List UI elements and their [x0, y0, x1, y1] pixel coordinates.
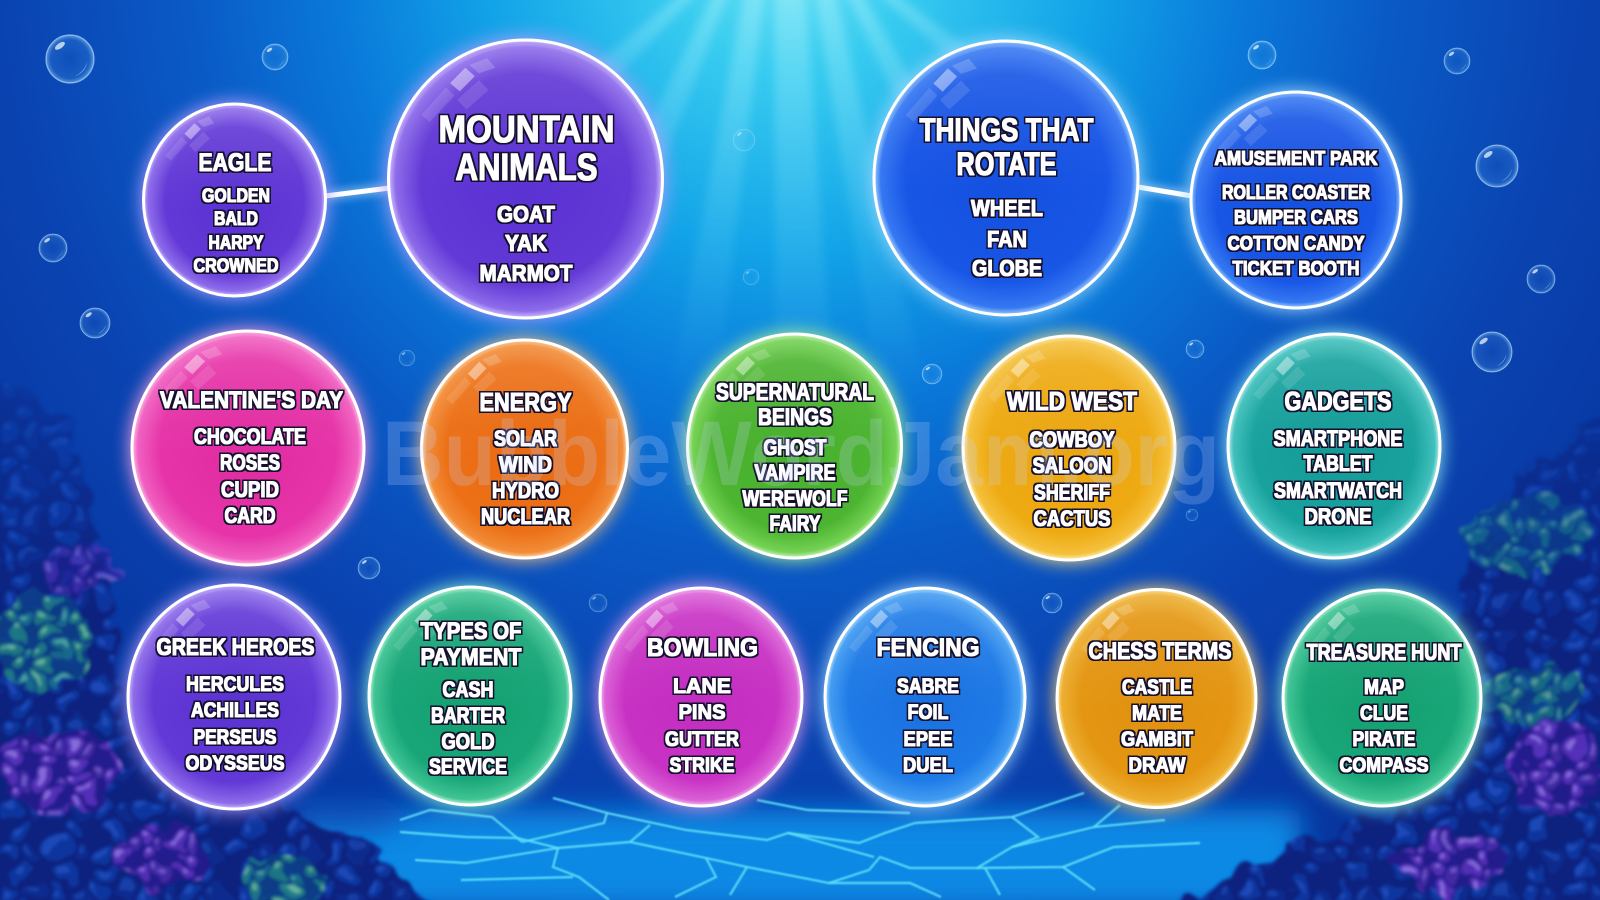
heading: gadgets: GADGETS [1284, 386, 1392, 416]
word list: supernatural beings: GHOST [764, 435, 827, 460]
word list: eagle: CROWNED [194, 256, 278, 277]
heading: things that rotate: THINGS THAT [920, 112, 1094, 148]
word list: valentine's day: ROSES [220, 450, 280, 475]
word list: mountain animals: YAK [505, 230, 547, 256]
heading: chess terms: CHESS TERMS [1088, 638, 1232, 665]
word list: gadgets: TABLET [1304, 451, 1373, 476]
word list: bowling: STRIKE [670, 754, 734, 777]
word list: chess terms: GAMBIT [1121, 728, 1193, 751]
bubble: energy [422, 340, 628, 558]
word list: fencing: EPEE [904, 728, 952, 751]
heading: types of payment [420, 618, 522, 671]
heading: valentine's day: VALENTINE'S DAY [160, 387, 343, 414]
bubble: gadgets [1228, 334, 1440, 558]
word list: supernatural beings: WEREWOLF [742, 486, 848, 511]
coral reef: left [0, 383, 450, 900]
word list: types of payment: CASH [442, 677, 494, 702]
heading: greek heroes: GREEK HEROES [156, 634, 314, 661]
word list: treasure hunt: COMPASS [1340, 754, 1428, 777]
heading: fencing: FENCING [876, 634, 980, 662]
heading: things that rotate: ROTATE [956, 146, 1056, 182]
small floating bubbles [39, 35, 1555, 613]
word list: gadgets: DRONE [1304, 504, 1372, 529]
word list: types of payment: BARTER [431, 703, 505, 728]
word list: valentine's day [194, 424, 306, 528]
word list: energy: HYDRO [492, 478, 559, 503]
bubble: mountain animals [388, 40, 662, 318]
word list: valentine's day: CUPID [221, 477, 279, 502]
bubble: bowling [600, 588, 802, 806]
bubble: fencing [825, 588, 1025, 806]
word list: chess terms: DRAW [1128, 754, 1186, 777]
heading: supernatural beings: SUPERNATURAL [716, 379, 874, 406]
bubble: valentine's day [132, 331, 364, 565]
word list: bowling: LANE [673, 675, 731, 698]
word list: greek heroes: ODYSSEUS [186, 752, 284, 775]
word list: bowling [665, 675, 739, 777]
heading: energy: ENERGY [480, 387, 572, 417]
word list: energy: NUCLEAR [481, 504, 570, 529]
word list: wild west: COWBOY [1030, 427, 1115, 452]
word list: gadgets: SMARTPHONE [1274, 426, 1402, 451]
word list: things that rotate [971, 195, 1043, 281]
word list: energy: WIND [499, 452, 552, 477]
word list: greek heroes: ACHILLES [191, 699, 279, 722]
heading: supernatural beings [716, 379, 874, 431]
word list: mountain animals: MARMOT [480, 260, 572, 286]
word list: amusement park: COTTON CANDY [1228, 233, 1365, 255]
connector: eagle to mountain animals [325, 188, 390, 196]
heading: treasure hunt: TREASURE HUNT [1306, 639, 1462, 665]
word list: gadgets [1274, 426, 1402, 529]
word list: amusement park [1222, 182, 1370, 280]
word list: bowling: PINS [678, 701, 726, 724]
bubble: greek heroes [128, 585, 340, 809]
heading: wild west: WILD WEST [1007, 386, 1137, 416]
word list: greek heroes [186, 673, 284, 775]
word list: fencing [897, 675, 959, 777]
bubble: amusement park [1191, 92, 1401, 308]
word list: greek heroes: HERCULES [186, 673, 284, 696]
word list: things that rotate: GLOBE [972, 255, 1042, 281]
word list: valentine's day: CHOCOLATE [194, 424, 306, 449]
heading: mountain animals: MOUNTAIN [438, 109, 614, 151]
word list: mountain animals: GOAT [497, 201, 555, 227]
word list: treasure hunt [1340, 676, 1428, 777]
word list: supernatural beings: VAMPIRE [754, 460, 836, 485]
heading: types of payment: TYPES OF [420, 618, 522, 645]
word list: types of payment: SERVICE [429, 754, 507, 779]
word list: energy: SOLAR [494, 426, 557, 451]
word list: valentine's day: CARD [224, 503, 276, 528]
bubble: wild west [963, 336, 1175, 560]
word list: fencing: DUEL [903, 754, 953, 777]
heading: mountain animals [438, 109, 614, 189]
word list: types of payment [429, 677, 507, 779]
word list: eagle: GOLDEN [202, 186, 270, 207]
word list: supernatural beings [742, 435, 848, 536]
heading: bowling: BOWLING [647, 634, 758, 662]
heading: things that rotate [920, 112, 1094, 182]
word list: fencing: SABRE [897, 675, 959, 698]
bubble: chess terms [1057, 590, 1256, 808]
word list: things that rotate: WHEEL [971, 195, 1043, 221]
heading: types of payment: PAYMENT [420, 644, 522, 671]
word list: treasure hunt: CLUE [1360, 702, 1408, 725]
word list: eagle: HARPY [208, 233, 264, 254]
bubble: eagle [144, 104, 326, 296]
word list: wild west [1030, 427, 1115, 531]
bubble: types of payment [369, 587, 571, 805]
watermark: BubbleWordJam.org [382, 403, 1220, 505]
word list: types of payment: GOLD [442, 729, 494, 754]
bubble: supernatural beings [688, 334, 902, 558]
word list: amusement park: ROLLER COASTER [1222, 182, 1370, 204]
word list: greek heroes: PERSEUS [194, 726, 276, 749]
word list: eagle [194, 186, 278, 277]
word list: amusement park: TICKET BOOTH [1232, 258, 1360, 280]
heading: amusement park: AMUSEMENT PARK [1214, 148, 1378, 170]
word list: chess terms [1121, 676, 1193, 777]
word list: mountain animals [480, 201, 572, 286]
coral reef: right [1178, 417, 1600, 900]
word list: bowling: GUTTER [665, 728, 739, 751]
word list: treasure hunt: PIRATE [1352, 728, 1416, 751]
word list: gadgets: SMARTWATCH [1274, 478, 1402, 503]
word list: treasure hunt: MAP [1364, 676, 1404, 699]
word list: amusement park: BUMPER CARS [1234, 207, 1358, 229]
word list: chess terms: MATE [1132, 702, 1182, 725]
heading: supernatural beings: BEINGS [758, 404, 832, 431]
word list: supernatural beings: FAIRY [770, 511, 821, 536]
word list: energy [481, 426, 570, 529]
word list: wild west: SALOON [1032, 453, 1112, 478]
heading: mountain animals: ANIMALS [456, 147, 598, 189]
word list: wild west: SHERIFF [1034, 480, 1110, 505]
word list: chess terms: CASTLE [1122, 676, 1192, 699]
connector: things that rotate to amusement park [1138, 187, 1192, 196]
word list: eagle: BALD [214, 209, 258, 230]
bubble: treasure hunt [1283, 590, 1481, 806]
bubble: things that rotate [874, 41, 1138, 315]
heading: eagle: EAGLE [198, 149, 272, 177]
word list: wild west: CACTUS [1034, 506, 1110, 531]
word list: fencing: FOIL [908, 701, 949, 724]
word list: things that rotate: FAN [987, 226, 1027, 252]
